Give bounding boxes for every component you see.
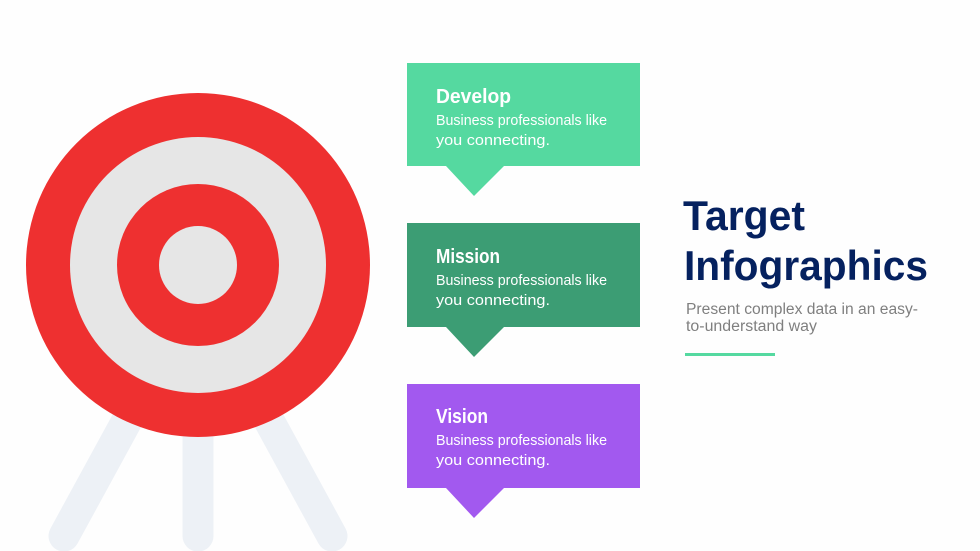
- text: mission description: [436, 272, 607, 309]
- text: develop description: [436, 112, 607, 149]
- panel: vision: [407, 384, 640, 518]
- text: mission description: Business professionals like: [436, 272, 607, 289]
- panel: mission: [407, 223, 640, 357]
- text: develop description: you connecting.: [436, 132, 550, 149]
- title: [683, 192, 928, 289]
- heading: vision: Vision: [436, 406, 488, 428]
- heading: develop: Develop: [436, 86, 511, 108]
- text: develop description: Business professionals like: [436, 112, 607, 129]
- text: vision description: [436, 432, 607, 469]
- accent line: [685, 353, 775, 356]
- heading: mission: Mission: [436, 246, 500, 268]
- text: vision description: you connecting.: [436, 452, 550, 469]
- panel: develop: [407, 63, 640, 196]
- subtitle: [686, 301, 918, 335]
- target stand legs: [64, 415, 332, 536]
- subtitle: Present complex data in an easy-: [686, 301, 918, 318]
- icon: target on tripod: [26, 93, 370, 536]
- target rings: [26, 93, 370, 437]
- title: Infographics: [684, 242, 928, 289]
- text: vision description: Business professionals like: [436, 432, 607, 449]
- text: mission description: you connecting.: [436, 292, 550, 309]
- title: Target: [683, 192, 805, 239]
- subtitle: to-understand way: [686, 318, 817, 335]
